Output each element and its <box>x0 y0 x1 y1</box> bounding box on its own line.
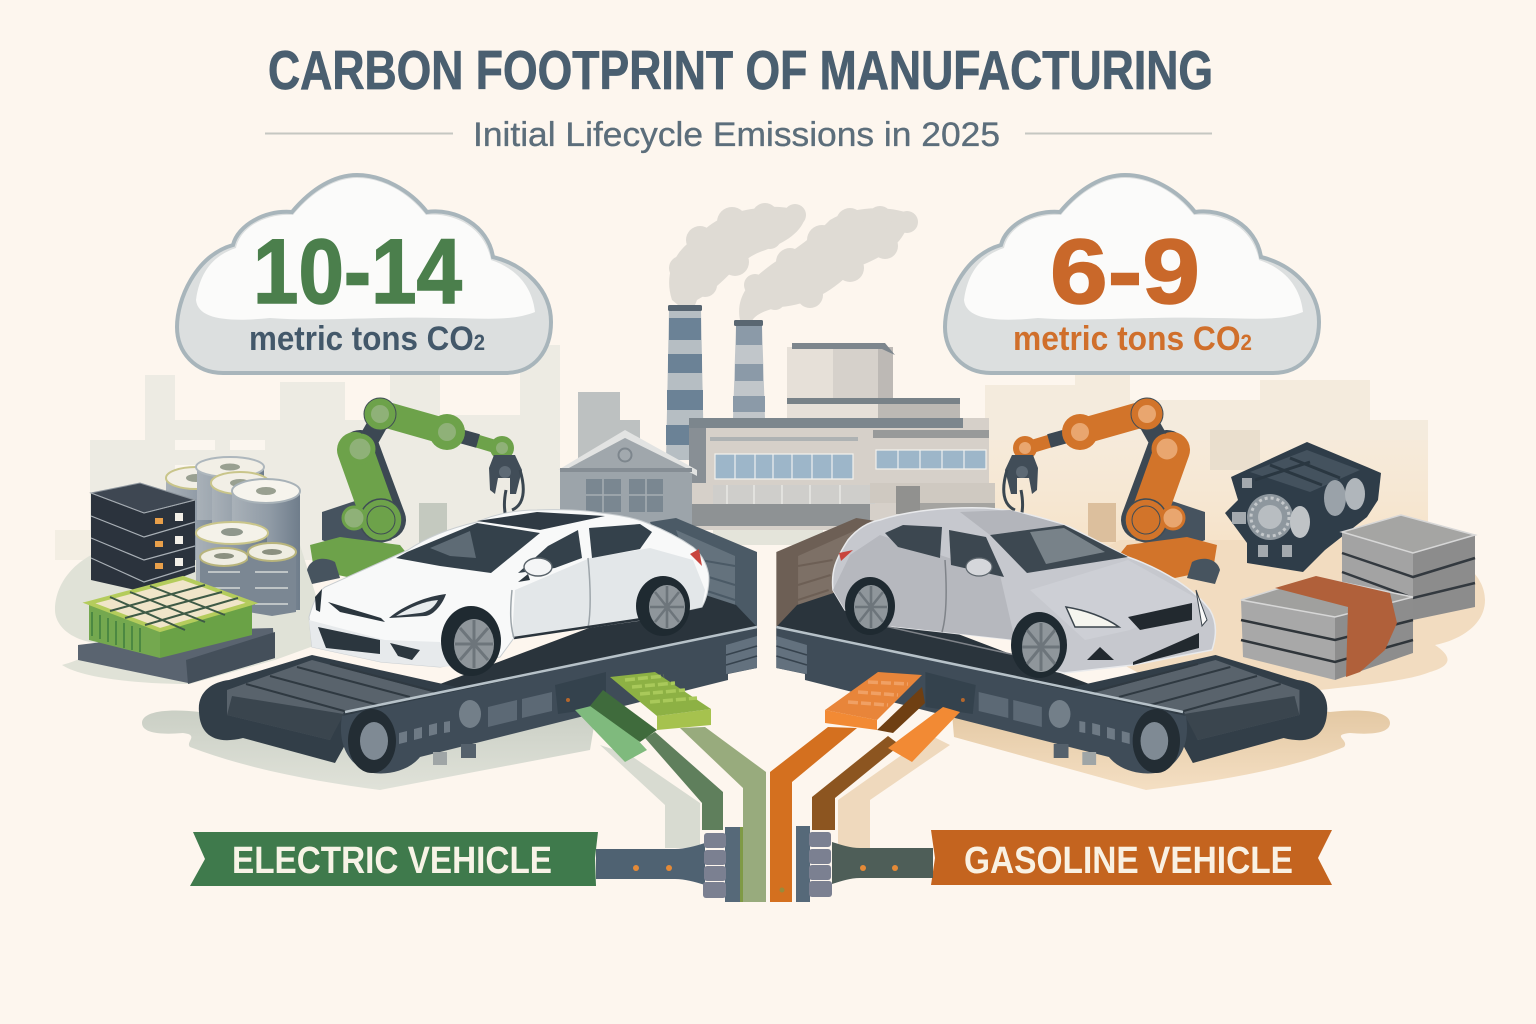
EV label: ELECTRIC VEHICLE <box>232 840 552 882</box>
ground shadow: gasoline conveyor <box>950 690 1390 790</box>
gasoline robot arm <box>1004 398 1220 584</box>
gasoline banner <box>931 830 1332 885</box>
EV banner <box>190 832 598 886</box>
EV cloud <box>177 175 551 373</box>
gasoline emissions value: 6-9 <box>1050 221 1200 323</box>
EV chip lower <box>575 703 647 762</box>
right skyline <box>985 350 1428 600</box>
gasoline connector <box>780 826 933 902</box>
EV battery pack <box>78 578 275 684</box>
subtitle: Initial Lifecycle Emissions in 2025 <box>473 116 1000 154</box>
gasoline chip upper <box>825 672 925 733</box>
pipe: brown <box>812 736 900 830</box>
gasoline label: GASOLINE VEHICLE <box>964 840 1293 882</box>
pipe: orange <box>770 727 857 902</box>
gasoline chip lower <box>888 707 960 762</box>
ground shadow: EV conveyor <box>142 680 600 790</box>
title: CARBON FOOTPRINT OF MANUFACTURING <box>268 39 1213 101</box>
steel ingots back stack <box>1342 515 1475 620</box>
main building <box>689 418 995 545</box>
silver gasoline car <box>833 508 1216 678</box>
scene block <box>419 503 447 543</box>
ground shadow: EV equipment <box>55 545 330 684</box>
EV robot arm <box>307 398 523 584</box>
storage block <box>787 343 960 419</box>
engine block <box>1225 442 1381 572</box>
shadow pipes <box>600 745 700 848</box>
chimney 1 <box>666 305 704 460</box>
EV conveyor <box>199 518 757 773</box>
EV units: metric tons CO2 <box>249 320 485 358</box>
factory <box>558 305 995 545</box>
ground shadow: gasoline equipment <box>1000 540 1485 700</box>
white electric car <box>309 510 709 676</box>
smoke plumes <box>669 203 918 321</box>
copper strap <box>1275 576 1397 677</box>
gasoline units: metric tons CO2 <box>1013 320 1252 358</box>
EV connector <box>596 827 743 902</box>
small gabled building <box>558 430 697 532</box>
EV chip upper <box>590 672 711 742</box>
steel ingots front stack <box>1241 577 1413 680</box>
gasoline conveyor <box>776 518 1327 773</box>
left skyline <box>55 345 640 560</box>
EV emissions value: 10-14 <box>253 221 462 323</box>
pipe: dark green <box>645 732 723 830</box>
EV battery cells <box>166 457 300 616</box>
chimney 2 <box>733 320 765 418</box>
gasoline cloud <box>945 175 1319 373</box>
pipe: light green <box>680 727 766 902</box>
EV server battery stack <box>91 483 195 592</box>
